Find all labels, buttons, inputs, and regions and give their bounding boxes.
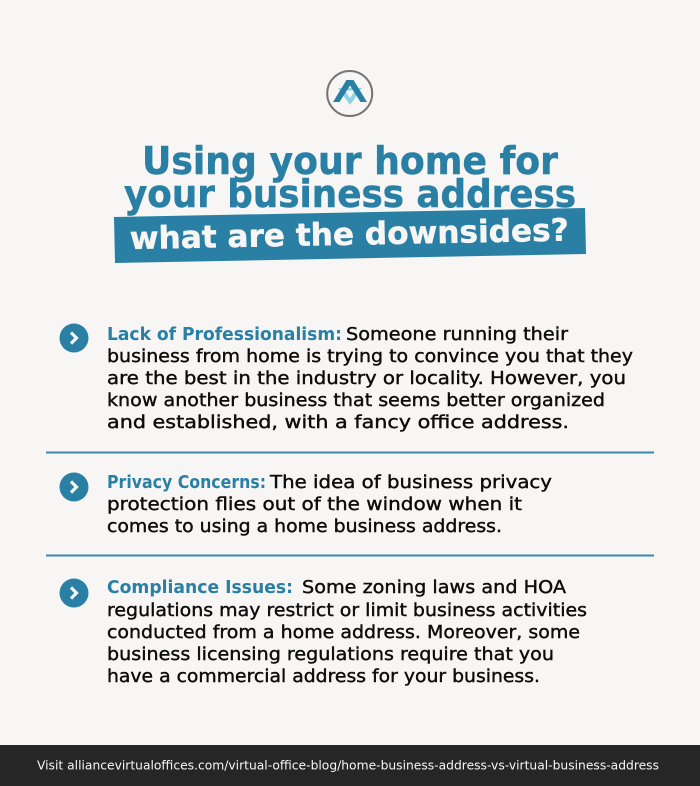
item: privacy concerns	[60, 472, 552, 537]
text block: compliance	[107, 577, 587, 687]
title: Using your home for	[142, 139, 558, 183]
text block: compliance: conducted from a home address. Moreover, some	[107, 623, 580, 643]
text block: privacy: comes to using a home business address.	[107, 517, 502, 537]
text block: compliance: have a commercial address for your business.	[107, 667, 540, 687]
title: your business address	[124, 172, 576, 216]
text block: compliance: Compliance Issues:	[107, 577, 293, 598]
text block: compliance: Some zoning laws and HOA	[302, 578, 566, 598]
text block: professionalism: Someone running their	[346, 325, 569, 345]
text block: professionalism: business from home is trying to convince you that they	[107, 347, 633, 367]
text block: professionalism: and established, with a fancy office address.	[107, 413, 569, 433]
title	[124, 139, 576, 216]
icon: chevron bullet	[60, 578, 88, 608]
text block: privacy: protection flies out of the window when it	[107, 495, 522, 515]
text block: compliance: regulations may restrict or limit business activities	[107, 601, 587, 621]
text block: privacy	[107, 472, 552, 537]
subtitle banner: what are the downsides?	[129, 213, 569, 257]
item: lack of professionalism	[60, 324, 633, 433]
text block: professionalism: Lack of Professionalism:	[107, 324, 342, 345]
footer bar: Visit alliancevirtualoffices.com/virtual-office-blog/home-business-address-vs-virtual-business-address	[37, 758, 659, 772]
text block: compliance: business licensing regulations require that you	[107, 645, 554, 665]
item: compliance issues	[60, 577, 587, 687]
text block: professionalism: know another business that seems better organized	[107, 391, 605, 411]
text block: privacy: Privacy Concerns:	[107, 472, 266, 493]
icon: company logo	[327, 71, 372, 116]
text block: professionalism: are the best in the industry or locality. However, you	[107, 369, 626, 389]
text block: professionalism	[107, 324, 633, 433]
icon: chevron bullet	[60, 324, 88, 352]
text block: privacy: The idea of business privacy	[269, 473, 552, 493]
icon: chevron bullet	[60, 472, 88, 502]
footer bar	[0, 745, 700, 786]
